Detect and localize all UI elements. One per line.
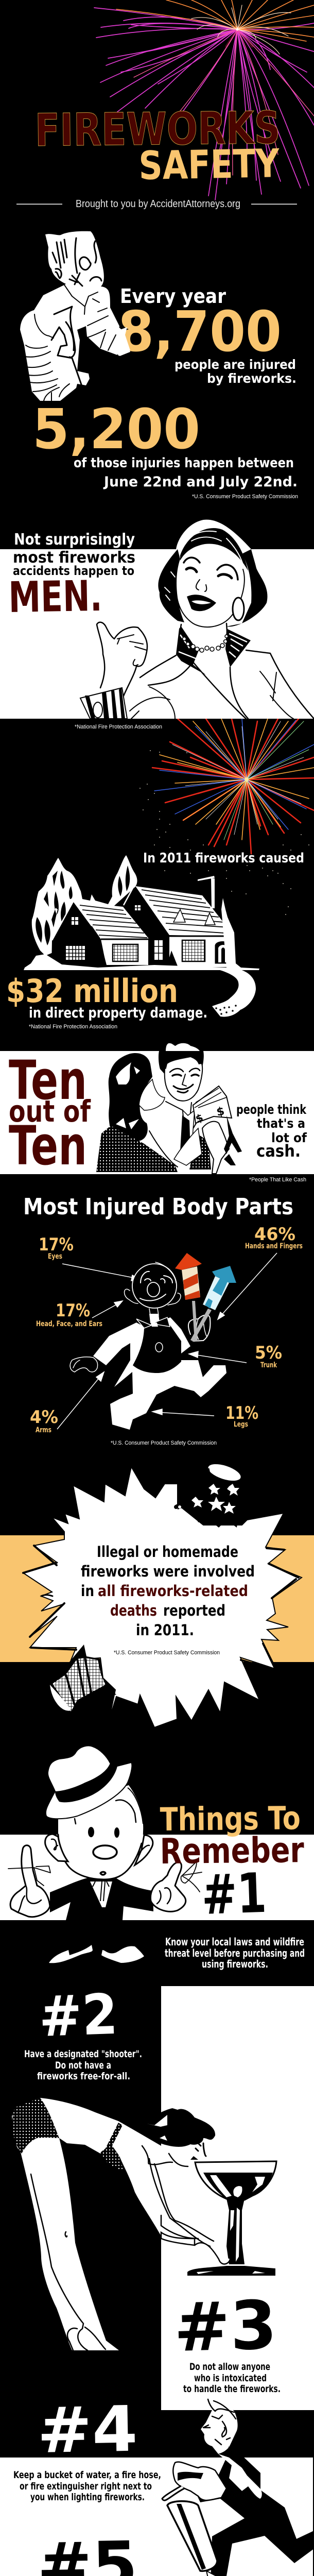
chart: body parts labels: Arms — [36, 1426, 51, 1434]
text: ten out of ten — [9, 1049, 91, 1177]
stat: 5,200 injuries: *U.S. Consumer Product Safety Commission — [192, 494, 298, 500]
heading: things to remeber — [160, 1799, 305, 1872]
panel: ten out of ten white band — [0, 1051, 314, 1174]
tip 3: to handle the fireworks. — [183, 2383, 281, 2395]
stat: 5,200 injuries: June 22nd and July 22nd. — [103, 474, 298, 490]
title: Fireworks Safety — [34, 101, 281, 189]
illustration: firework canister top — [176, 1461, 242, 1528]
text: illegal fireworks statement: *U.S. Consumer Product Safety Commission — [114, 1650, 220, 1656]
stat: 5,200 injuries — [32, 398, 298, 500]
text: people think that's a lot of cash — [236, 1102, 307, 1183]
tip 2: Have a designated "shooter". — [24, 2048, 142, 2060]
text: illegal fireworks statement: all fireworks-related — [98, 1582, 248, 1600]
panel: men white band — [0, 549, 314, 719]
tip 1: #1 — [201, 1861, 268, 1927]
chart: body parts labels: 11% — [225, 1403, 258, 1423]
chart: body parts labels: 17% — [39, 1234, 74, 1255]
text: most accidents happen to men: accidents happen to — [13, 564, 134, 578]
illustration: woman pointing thumb — [80, 520, 314, 719]
chart: body parts labels: Legs — [234, 1420, 248, 1429]
illustration: injured man on crutch — [20, 231, 130, 401]
illustration: firework canister bottom — [50, 1645, 116, 1711]
illustration: house — [24, 855, 259, 1017]
chart: body parts labels: 46% — [254, 1224, 295, 1245]
illustration: woman bending over cocktail glass — [12, 2098, 276, 2350]
tip 4 text: or fire extinguisher right next to — [20, 2481, 152, 2492]
tip 4 text — [13, 2469, 161, 2503]
text: illegal fireworks statement: in 2011. — [136, 1621, 194, 1639]
stat: 8,700 injured: 8,700 — [118, 300, 282, 364]
stat: 5,200 injuries: 5,200 — [32, 398, 200, 462]
illustration: couple with cash — [96, 1043, 242, 1174]
text: illegal fireworks statement: Illegal or homemade — [97, 1543, 238, 1561]
chart: body parts labels: Eyes — [48, 1252, 62, 1261]
text: most accidents happen to men: MEN. — [8, 572, 102, 622]
byline with rules: Brought to you by AccidentAttorneys.org — [76, 198, 240, 210]
tip 3: #3 — [173, 2286, 278, 2367]
tip 3: Do not allow anyone — [189, 2361, 270, 2372]
text: ten out of ten: Ten — [9, 1049, 87, 1112]
firework: magenta burst — [94, 0, 314, 200]
stat: $32 million damage: $32 million — [6, 972, 178, 1010]
text: ten out of ten: Ten — [9, 1114, 87, 1177]
text: illegal fireworks statement: deaths — [110, 1602, 157, 1619]
illustration: man with fire extinguisher — [162, 2399, 314, 2576]
illustration: couple with cash: $ — [194, 1111, 205, 1125]
illustration: man with hat and strings on fingers — [8, 1745, 202, 1963]
stat: $32 million damage: *National Fire Protection Association — [29, 1024, 117, 1030]
text: illegal fireworks statement — [81, 1543, 255, 1656]
tip 2 — [24, 1982, 142, 2082]
chart: body parts labels: *U.S. Consumer Product Safety Commission — [111, 1440, 217, 1446]
stat: $32 million damage: in direct property damage. — [29, 1004, 207, 1021]
tip 4 text: you when lighting fireworks. — [30, 2492, 145, 2503]
stat: 8,700 injured — [111, 285, 296, 386]
stat: $32 million damage — [6, 972, 207, 1030]
tip 2: #2 — [38, 1982, 119, 2049]
panel: tip 4 and 5 white band — [0, 2458, 313, 2576]
tip 2: fireworks free-for-all. — [37, 2071, 130, 2082]
chart: body parts labels: 4% — [30, 1407, 58, 1428]
chart: body parts labels — [30, 1224, 303, 1446]
text: people think that's a lot of cash: that's a — [257, 1116, 305, 1131]
text: people think that's a lot of cash: *People That Like Cash — [249, 1177, 306, 1183]
chart: body parts labels: Head, Face, and Ears — [36, 1320, 102, 1328]
firework: multicolour burst — [140, 719, 314, 914]
tip 1 — [165, 1861, 305, 1970]
panel: things to remember white band — [0, 1835, 314, 1920]
chart: body parts labels: 5% — [255, 1343, 282, 1363]
text: illegal fireworks statement: fireworks were involved — [81, 1563, 255, 1580]
text: most accidents happen to men: Not surprisingly — [14, 531, 135, 549]
stat: 8,700 injured: Every year — [120, 285, 226, 308]
stat: 8,700 injured: by fireworks. — [207, 371, 296, 386]
illustration: starburst callout — [23, 1467, 302, 1727]
text: most accidents happen to men: most fireworks — [13, 549, 135, 567]
title: Fireworks Safety: SAFETY — [138, 140, 280, 189]
panel: tan band — [0, 1535, 314, 1662]
text: ten out of ten: out of — [9, 1094, 91, 1129]
panel: tip 3 white column — [161, 1986, 314, 2410]
text: most accidents happen to men: *National Fire Protection Association — [75, 724, 162, 730]
tip 4 heading: #4 — [37, 2393, 138, 2467]
tip 2: Do not have a — [55, 2060, 111, 2071]
illustration: couple with cash: $ — [215, 1105, 225, 1119]
text: people think that's a lot of cash: cash. — [256, 1141, 301, 1161]
illustration: cartoon man with rockets — [70, 1253, 236, 1430]
tip 4 text: Keep a bucket of water, a fire hose, — [13, 2469, 161, 2481]
arrows: body part pointers — [57, 1253, 277, 1429]
text: people think that's a lot of cash: lot of — [271, 1130, 307, 1145]
text: most accidents happen to men — [8, 531, 162, 730]
chart: body parts labels: 17% — [56, 1300, 90, 1321]
chart: body parts labels: Trunk — [260, 1361, 277, 1369]
text: illegal fireworks statement: in — [81, 1582, 94, 1600]
tip 3: who is intoxicated — [194, 2372, 267, 2384]
text: illegal fireworks statement: reported — [163, 1602, 225, 1619]
tip 1: using fireworks. — [202, 1958, 268, 1970]
stat: 8,700 injured: people are injured — [175, 357, 296, 372]
